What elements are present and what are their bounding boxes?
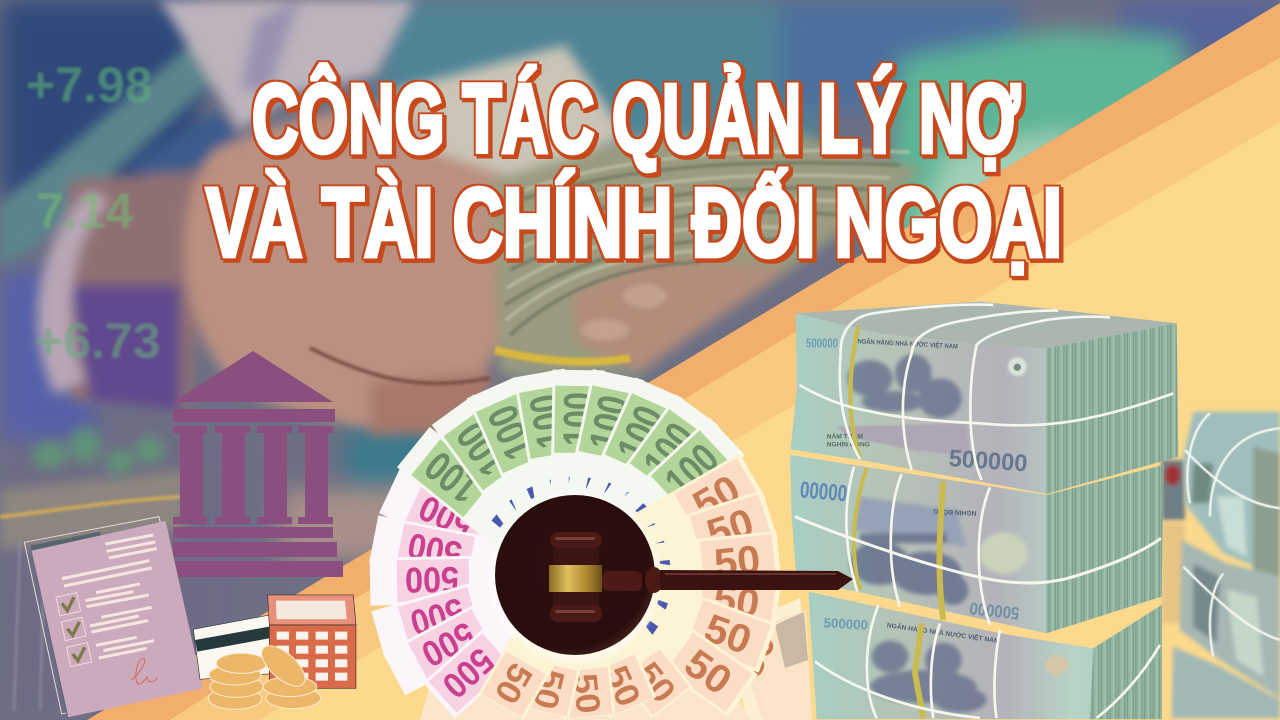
- icon: calculator: [268, 595, 356, 688]
- 100 euro notes: 100: [634, 414, 704, 485]
- 50 euro notes: 50: [702, 501, 759, 557]
- 500 euro notes: 500: [435, 640, 502, 707]
- extra 50 euro notes lower right: [723, 598, 812, 720]
- 50 euro notes: [478, 453, 782, 720]
- filler of note backs along bottom edge: [420, 650, 750, 720]
- 50 euro notes: 50: [525, 665, 571, 713]
- icon: bank card: [193, 615, 277, 679]
- stacks of VND banknotes, rear right: [1162, 412, 1280, 718]
- top brick: [791, 302, 1178, 494]
- middle brick: NGHÌN ĐỒNG: [933, 507, 977, 519]
- bottom brick: [808, 592, 1162, 719]
- title: [206, 64, 1062, 277]
- icon: gold coins: [208, 639, 321, 709]
- middle brick: 500000: [968, 598, 1020, 623]
- 100 euro notes: 100: [608, 399, 673, 467]
- 100 euro notes: 100: [416, 442, 488, 513]
- bottom brick: NGÂN HÀNG NHÀ NƯỚC VIỆT NAM: [886, 620, 1001, 645]
- top brick: NGHÌN ĐỒNG: [827, 439, 870, 449]
- middle brick: [790, 455, 1163, 633]
- 500 euro notes: 500: [405, 559, 459, 601]
- 50 euro notes: 50: [597, 660, 648, 712]
- 50 euro notes: 50: [710, 577, 762, 627]
- 50 euro notes: 50: [699, 606, 757, 663]
- euro banknote fan: [369, 369, 812, 720]
- stock ticker numbers: [26, 57, 161, 369]
- 500 euro notes: 500: [404, 525, 465, 575]
- 100 euro notes: [397, 369, 745, 554]
- 50 euro notes: 50: [487, 656, 540, 710]
- middle brick: 00000: [799, 476, 848, 506]
- 500 euro notes: [369, 470, 539, 718]
- 50 euro notes: 50: [686, 467, 748, 528]
- 100 euro notes: 100: [580, 391, 637, 454]
- stacks of VND banknotes, main: [790, 302, 1178, 719]
- icon: bank building: [173, 351, 343, 577]
- 100 euro notes: 100: [447, 413, 517, 485]
- 50 euro notes: 50: [565, 672, 607, 715]
- 100 euro notes: 100: [554, 392, 602, 446]
- stock ticker numbers: +6.73: [34, 313, 161, 369]
- 100 euro notes: 100: [520, 391, 576, 452]
- stock ticker numbers: +7.98: [26, 57, 153, 113]
- top brick: 500000: [948, 445, 1028, 477]
- 50 euro notes: 50: [712, 538, 762, 586]
- 500 euro notes: 500: [412, 487, 479, 547]
- 500 euro notes: 500: [406, 590, 469, 644]
- 50 euro notes: 50: [676, 641, 739, 704]
- bottom brick: 500000: [823, 615, 868, 633]
- 50 euro notes: 50: [628, 655, 683, 710]
- 500 euro notes: 500: [415, 614, 482, 675]
- judge gavel and sound block: [490, 493, 853, 663]
- stock ticker numbers: 7.14: [36, 183, 134, 239]
- top brick: NGÂN HÀNG NHÀ NƯỚC VIỆT NAM: [857, 336, 959, 351]
- 100 euro notes: 100: [656, 434, 727, 506]
- extra 50 euro notes lower right: 50: [728, 626, 785, 684]
- top brick: 500000: [806, 335, 838, 350]
- icon: checklist document: [24, 517, 203, 717]
- top brick: NĂM TRĂM: [827, 431, 863, 440]
- 100 euro notes: 100: [478, 398, 543, 467]
